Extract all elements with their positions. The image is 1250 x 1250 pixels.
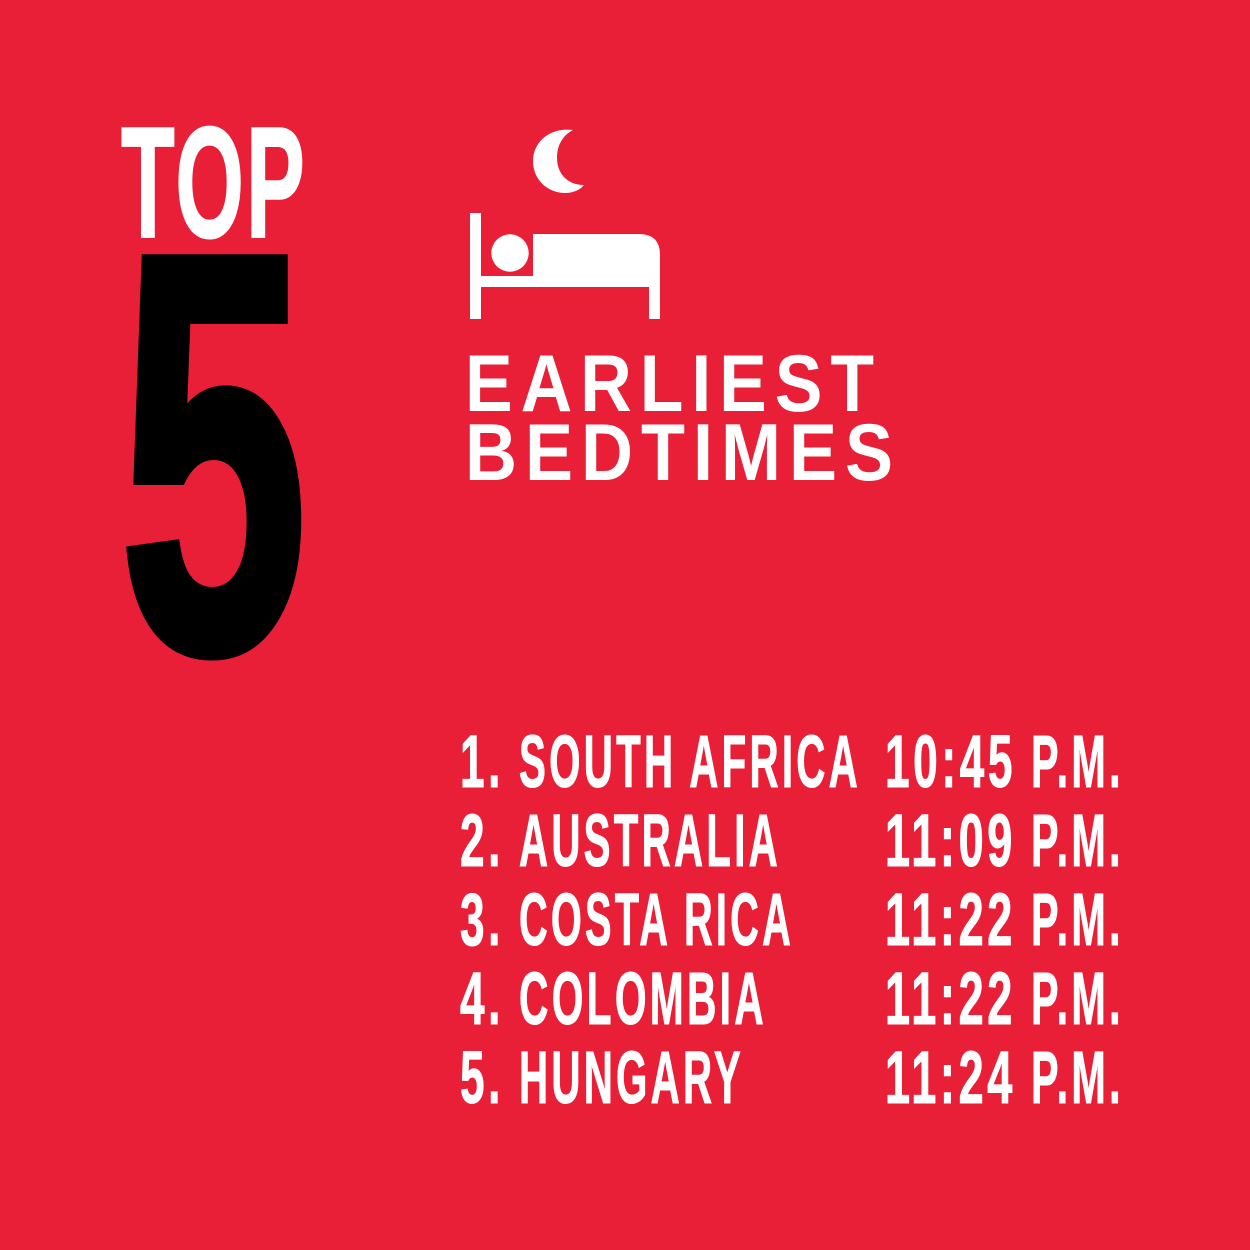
row 3: Costa Rica: P.M. (1031, 878, 1124, 961)
row 5: Hungary: 11:24 (885, 1036, 1016, 1119)
heading: large numeral 5: 5 (120, 138, 307, 769)
row 4: Colombia: P.M. (1031, 957, 1124, 1040)
icon: bed with sleeper (470, 213, 660, 319)
row 4: Colombia (460, 957, 1124, 1040)
row 2: Australia: P.M. (1031, 799, 1124, 882)
row 3: Costa Rica: COSTA RICA (519, 878, 794, 961)
row 5: Hungary: HUNGARY (519, 1036, 744, 1119)
row 5: Hungary (460, 1036, 1124, 1119)
row 2: Australia: AUSTRALIA (519, 799, 781, 882)
row 3: Costa Rica: 3. (460, 878, 504, 961)
heading line: BEDTIMES: BEDTIMES (465, 408, 901, 498)
row 4: Colombia: 4. (460, 957, 504, 1040)
icon: moon and person in bed (470, 130, 660, 319)
row 3: Costa Rica: 11:22 (885, 878, 1016, 961)
row 5: Hungary: 5. (460, 1036, 504, 1119)
row 2: Australia: 2. (460, 799, 504, 882)
icon: crescent moon (533, 130, 584, 193)
ranked list of countries and bedtimes (460, 720, 1124, 1119)
row 1: South Africa: SOUTH AFRICA (519, 720, 861, 803)
row 4: Colombia: 11:22 (885, 957, 1016, 1040)
row 1: South Africa: 10:45 (885, 720, 1016, 803)
heading line: EARLIEST: EARLIEST (465, 339, 882, 429)
row 5: Hungary: P.M. (1031, 1036, 1124, 1119)
row 1: South Africa: 1. (460, 720, 504, 803)
row 1: South Africa: P.M. (1031, 720, 1124, 803)
heading: EARLIEST BEDTIMES (465, 339, 901, 498)
row 4: Colombia: COLOMBIA (519, 957, 767, 1040)
row 2: Australia: 11:09 (885, 799, 1016, 882)
heading: TOP: TOP (121, 95, 307, 271)
